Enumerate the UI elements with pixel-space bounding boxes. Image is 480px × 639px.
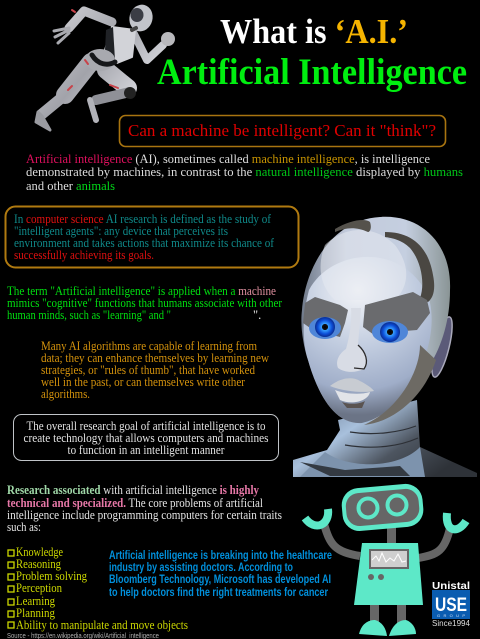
text block: the term AI [7, 284, 283, 322]
icon: robot face [293, 217, 477, 477]
panel: overall research goal: to function in an intelligent manner [68, 443, 225, 457]
list: traits: Perception [16, 580, 62, 595]
text block: the term AI: human minds, such as "learning" and " [7, 308, 171, 322]
list: traits: Learning [16, 593, 55, 608]
list: traits: Reasoning [16, 556, 61, 571]
text block: algorithms: well in the past, or can themselves write other [41, 375, 246, 389]
text block: research associated: Research associated with artificial intelligence is highly [7, 482, 259, 497]
text block: algorithms: Many AI algorithms are capable of learning from [41, 339, 257, 353]
list: traits: Knowledge [16, 544, 63, 559]
panel: overall research goal [14, 414, 278, 460]
text block: the term AI: ". [253, 308, 261, 322]
callout: healthcare: industry by assisting doctors. According to [109, 562, 293, 574]
text block: the term AI: The term "Artificial intelligence" is applied when a machine [7, 284, 276, 298]
list: traits: Ability to manipulate and move objects [16, 617, 188, 632]
text block: definition: and other animals [26, 178, 115, 193]
callout: healthcare: Artificial intelligence is breaking into the healthcare [109, 550, 332, 562]
callout: healthcare [109, 550, 332, 599]
panel: overall research goal: create technology that allows computers and machines [24, 431, 269, 445]
title: What is A.I.: What is ‘A.I.’ [220, 12, 408, 51]
text block: research associated: technical and specialized. The core problems of artificial [7, 495, 263, 510]
text block: definition: demonstrated by machines, in contrast to the natural intelligence displayed by humans [26, 164, 463, 179]
icon: running robot [36, 2, 175, 130]
text block: definition: Artificial intelligence (AI), sometimes called machine intelligence, is intelligence [26, 151, 430, 166]
logo: Unistal USE Group [432, 580, 471, 628]
callout: healthcare: to help doctors find the right treatments for cancer [109, 587, 328, 599]
list: traits: Problem solving [16, 568, 87, 583]
text block: algorithms [41, 339, 269, 401]
panel: computer science definition: environment and takes actions that maximize its chance of [14, 236, 275, 250]
callout: question [120, 116, 446, 146]
list: traits [8, 544, 188, 632]
icon: teal robot [305, 483, 466, 636]
list: traits: Planning [16, 605, 55, 620]
logo: Unistal USE Group: Since1994 [432, 619, 471, 628]
panel: computer science definition: In computer science AI research is defined as the study of [14, 212, 272, 226]
text block: research associated [7, 482, 282, 534]
callout: question: Can a machine be intelligent? Can it "think"? [128, 121, 436, 140]
logo: Unistal USE Group: USE [435, 595, 467, 616]
text block: research associated: intelligence include programming computers for certain traits [7, 507, 282, 522]
text block: research associated: such as: [7, 519, 41, 534]
panel: computer science definition: "intelligent agents": any device that perceives its [14, 224, 228, 238]
panel: overall research goal: The overall research goal of artificial intelligence is to [26, 419, 266, 433]
text block: definition [26, 151, 463, 193]
panel: computer science definition [6, 206, 298, 268]
text block: algorithms: algorithms. [41, 387, 90, 401]
text block: the term AI: mimics "cognitive" functions that humans associate with other [7, 296, 283, 310]
logo: Unistal USE Group: Unistal [432, 580, 470, 592]
text block: algorithms: strategies, or "rules of thumb", that have worked [41, 363, 256, 377]
panel: computer science definition: successfully achieving its goals. [14, 248, 154, 262]
logo: Unistal USE Group: GROUP [437, 613, 465, 618]
text block: algorithms: data; they can enhance themselves by learning new [41, 351, 269, 365]
callout: healthcare: Bloomberg Technology, Microsoft has developed AI [109, 574, 331, 586]
